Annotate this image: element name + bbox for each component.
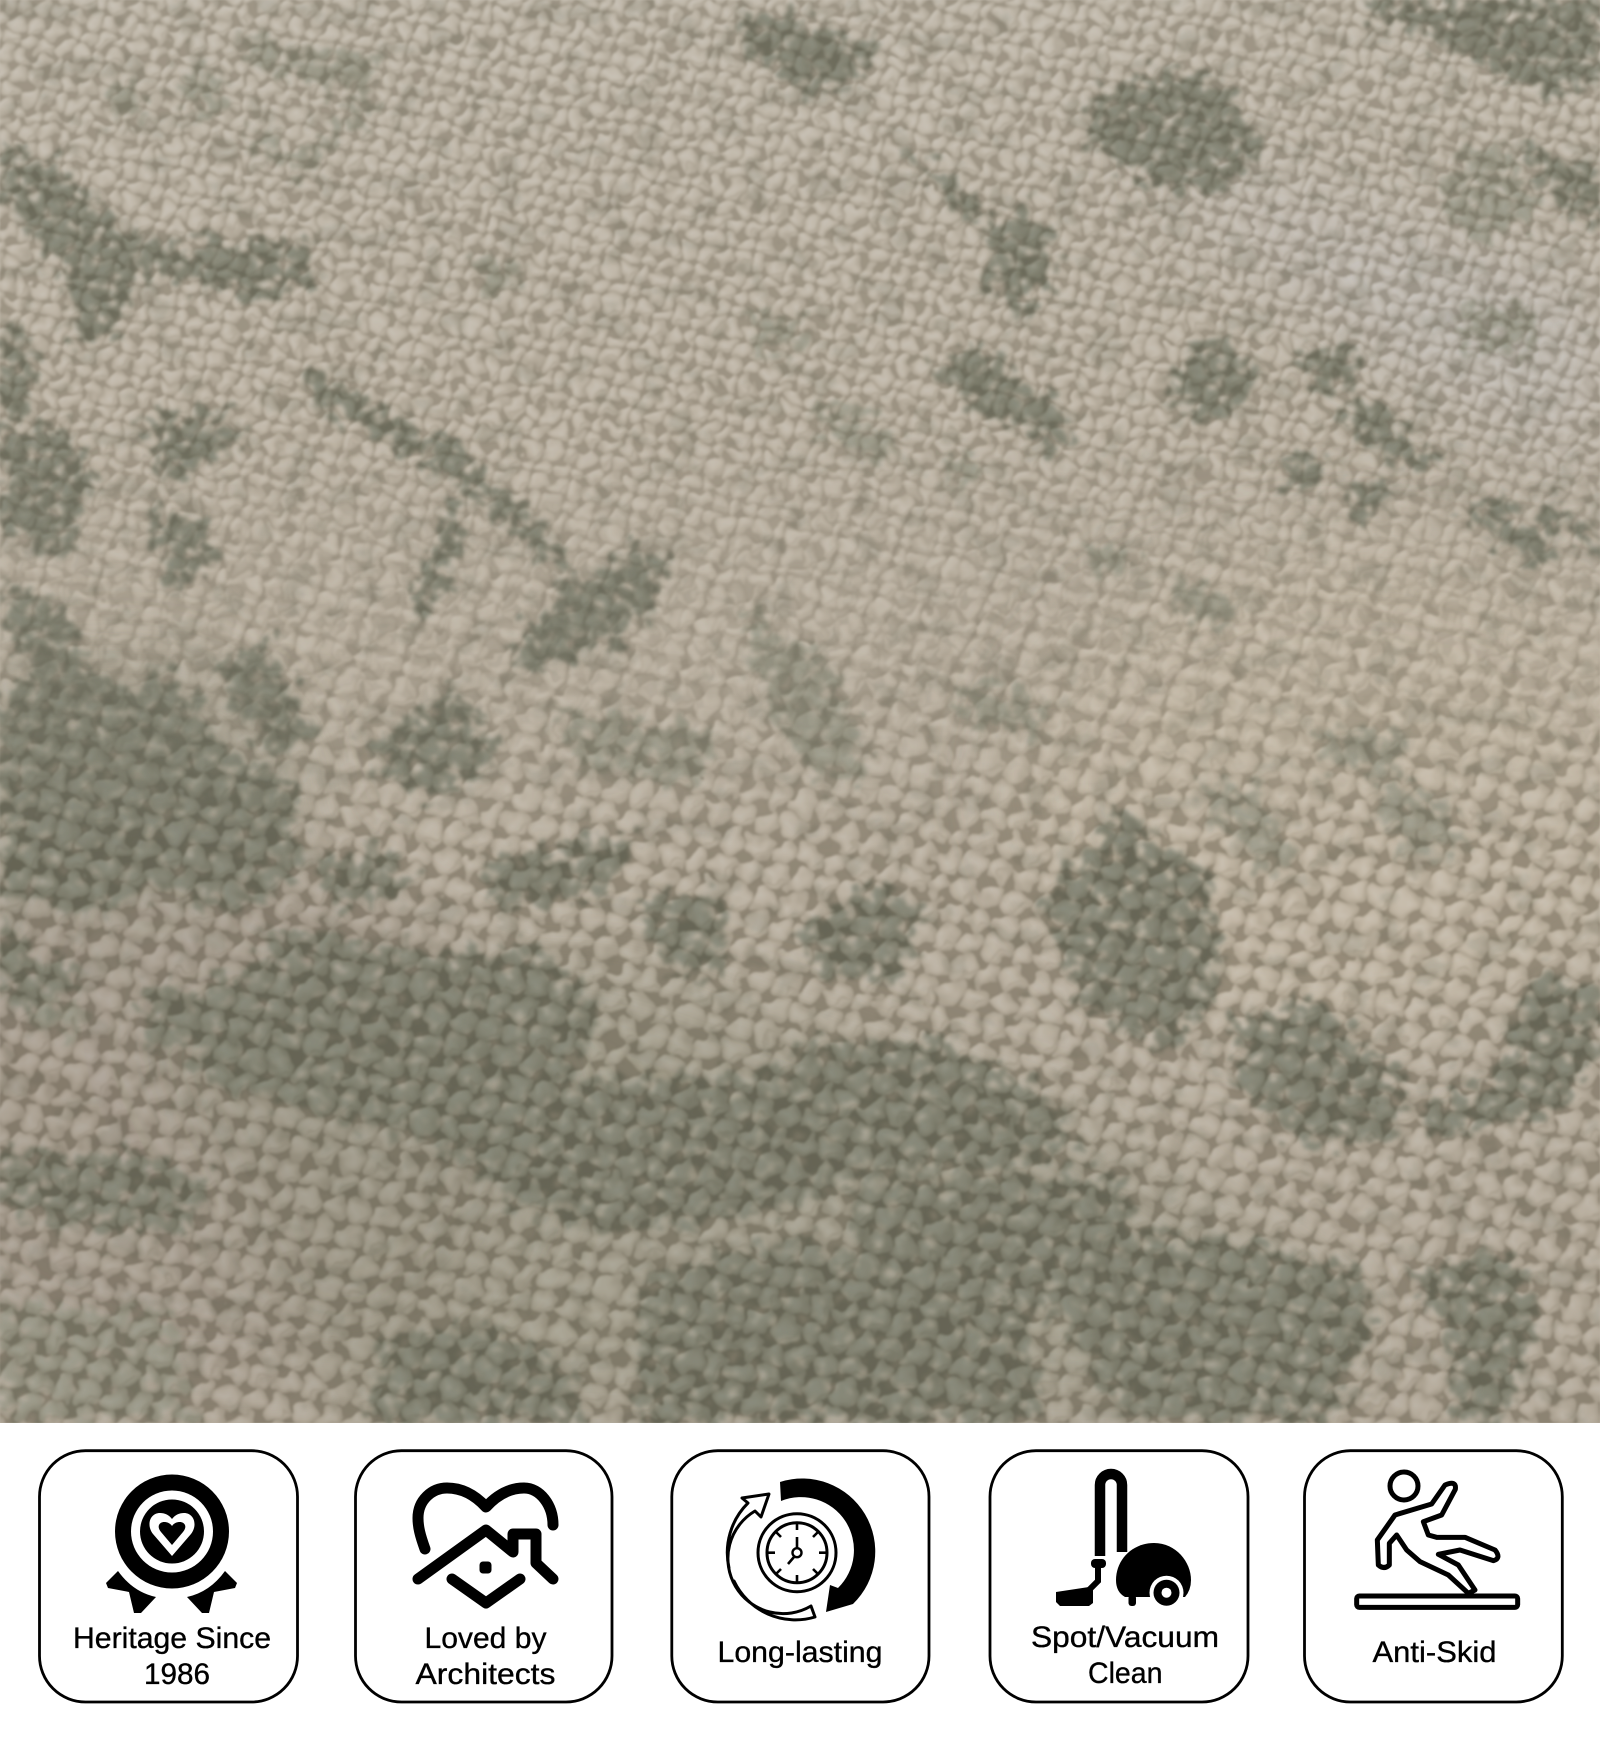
panel: Heritage Since 1986 bbox=[40, 1451, 298, 1702]
label: Spot/Vacuum Clean: Spot/Vacuum bbox=[1031, 1621, 1219, 1654]
icon: person slipping on floor bbox=[1357, 1472, 1518, 1607]
label: Anti-Skid: Anti-Skid bbox=[1372, 1636, 1496, 1669]
label: Loved by Architects: Architects bbox=[416, 1658, 556, 1691]
icon: clock with circular arrows bbox=[727, 1479, 875, 1620]
icon: vacuum cleaner bbox=[1056, 1474, 1191, 1610]
panel: Long-lasting bbox=[672, 1451, 929, 1702]
panel: Spot/Vacuum Clean bbox=[990, 1451, 1248, 1702]
label: Heritage Since 1986: 1986 bbox=[144, 1658, 210, 1691]
panel: Loved by Architects bbox=[356, 1451, 612, 1702]
label: Loved by Architects: Loved by bbox=[424, 1622, 546, 1655]
icon: house inside heart bbox=[418, 1488, 553, 1603]
icon: award rosette with heart bbox=[106, 1474, 237, 1613]
panel: Anti-Skid bbox=[1304, 1451, 1562, 1702]
label: Heritage Since 1986: Heritage Since bbox=[73, 1622, 271, 1655]
label: Long-lasting: Long-lasting bbox=[718, 1636, 882, 1669]
label: Spot/Vacuum Clean: Clean bbox=[1088, 1657, 1162, 1690]
